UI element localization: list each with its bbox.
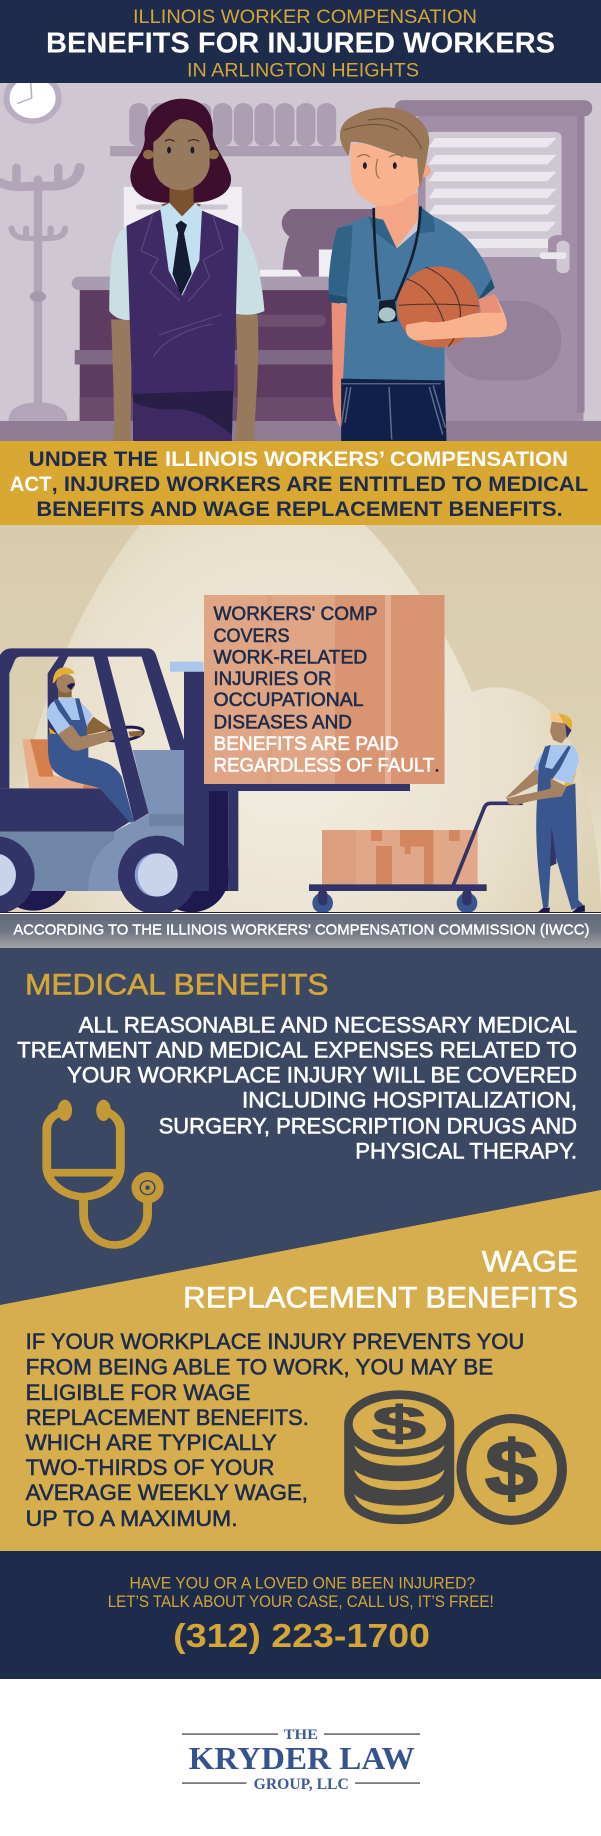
panel: source band <box>0 914 601 948</box>
panel: warehouse scene <box>0 525 601 914</box>
heading: wage replacement benefits: WAGE <box>482 1246 578 1279</box>
heading: title: BENEFITS FOR INJURED WORKERS <box>46 27 555 59</box>
wheels <box>0 836 197 914</box>
callout text: WORK-RELATED <box>214 646 367 668</box>
cart boxes <box>322 830 478 884</box>
icon: shelf with binders <box>110 103 348 156</box>
icon: coins: $ <box>485 1424 538 1512</box>
wage benefits text: AVERAGE WEEKLY WAGE, <box>26 1480 308 1505</box>
wage benefits text: FROM BEING ABLE TO WORK, YOU MAY BE <box>26 1354 493 1379</box>
panel: call to action <box>0 1551 601 1679</box>
callout text <box>214 603 440 777</box>
medical benefits text: TREATMENT AND MEDICAL EXPENSES RELATED TO <box>17 1038 577 1063</box>
panel: gold statement banner: , INJURED WORKERS ARE ENTITLED TO MEDICAL <box>52 473 588 496</box>
wage benefits text: ELIGIBLE FOR WAGE <box>26 1380 250 1405</box>
door <box>395 100 592 421</box>
panel: gold statement banner: ILLINOIS WORKERS’ COMPENSATION <box>165 448 568 471</box>
logo: The Kryder Law Group: KRYDER LAW <box>189 1740 415 1776</box>
worker <box>505 713 585 913</box>
call to action text: HAVE YOU OR A LOVED ONE BEEN INJURED? <box>130 1575 475 1593</box>
logo: The Kryder Law Group <box>182 1727 420 1793</box>
medical benefits text <box>17 1013 577 1164</box>
heading: top line: ILLINOIS WORKER COMPENSATION <box>133 6 477 28</box>
medical benefits text: ALL REASONABLE AND NECESSARY MEDICAL <box>79 1013 577 1038</box>
callout text: INJURIES OR <box>214 668 332 690</box>
wage benefits text: REPLACEMENT BENEFITS. <box>26 1405 309 1430</box>
icon: wall clock <box>7 75 59 121</box>
wage benefits text: WHICH ARE TYPICALLY <box>26 1430 277 1455</box>
driver <box>47 667 144 823</box>
floor line <box>0 912 601 913</box>
icon: stethoscope <box>47 1100 164 1245</box>
callout text: OCCUPATIONAL <box>214 689 364 711</box>
logo: The Kryder Law Group: GROUP, LLC <box>254 1776 349 1793</box>
forklift with driver <box>0 648 238 914</box>
phone number: (312) 223-1700 <box>173 1617 430 1654</box>
callout text: COVERS <box>214 625 290 647</box>
panel: source band: ACCORDING TO THE ILLINOIS WORKERS' COMPENSATION COMMISSION (IWCC) <box>13 922 589 938</box>
panel: workers' comp callout box <box>204 595 444 791</box>
heading: wage replacement benefits: REPLACEMENT BENEFITS <box>183 1282 578 1315</box>
wage benefits text: IF YOUR WORKPLACE INJURY PREVENTS YOU <box>26 1329 524 1354</box>
reception desk <box>72 187 376 421</box>
wage benefits text: TWO-THIRDS OF YOUR <box>26 1455 274 1480</box>
callout text: REGARDLESS OF FAULT <box>214 755 434 777</box>
floor <box>0 420 601 441</box>
callout text: WORKERS' COMP <box>214 603 378 625</box>
callout text: BENEFITS ARE PAID <box>214 733 398 755</box>
panel: gold statement banner: ACT <box>10 473 52 496</box>
heading: wage replacement benefits <box>183 1246 578 1315</box>
cart <box>309 803 523 913</box>
panel: gold statement banner: UNDER THE <box>29 448 158 471</box>
figure: man with basketball <box>329 108 507 441</box>
heading: medical benefits: MEDICAL BENEFITS <box>25 968 328 1001</box>
call to action text: LET’S TALK ABOUT YOUR CASE, CALL US, IT’S FREE! <box>108 1593 494 1611</box>
panel: header bar <box>0 0 601 83</box>
panel: medical benefits <box>0 948 601 1308</box>
callout text: DISEASES AND <box>214 711 352 733</box>
cart and pusher <box>309 713 585 913</box>
panel: gold statement banner: BENEFITS AND WAGE REPLACEMENT BENEFITS. <box>36 498 563 521</box>
seat <box>22 739 100 788</box>
heading: location: IN ARLINGTON HEIGHTS <box>187 59 419 81</box>
logo: The Kryder Law Group: THE <box>284 1727 318 1743</box>
panel: office scene <box>0 75 601 445</box>
call to action text <box>108 1575 494 1611</box>
wage benefits text: UP TO A MAXIMUM. <box>26 1506 238 1531</box>
callout text: . <box>434 755 440 777</box>
icon: coins: $ <box>372 1398 427 1451</box>
medical benefits text: SURGERY, PRESCRIPTION DRUGS AND <box>159 1114 577 1139</box>
panel: wage replacement benefits <box>0 1190 601 1551</box>
medical benefits text: YOUR WORKPLACE INJURY WILL BE COVERED <box>67 1063 577 1088</box>
panel: gold statement banner <box>0 441 601 525</box>
medical benefits text: INCLUDING HOSPITALIZATION, <box>242 1088 577 1113</box>
figure: woman in vest <box>109 99 264 441</box>
icon: coat rack <box>0 167 80 421</box>
wage benefits text <box>26 1329 524 1531</box>
medical benefits text: PHYSICAL THERAPY. <box>355 1139 577 1164</box>
icon: coins <box>344 1390 562 1524</box>
